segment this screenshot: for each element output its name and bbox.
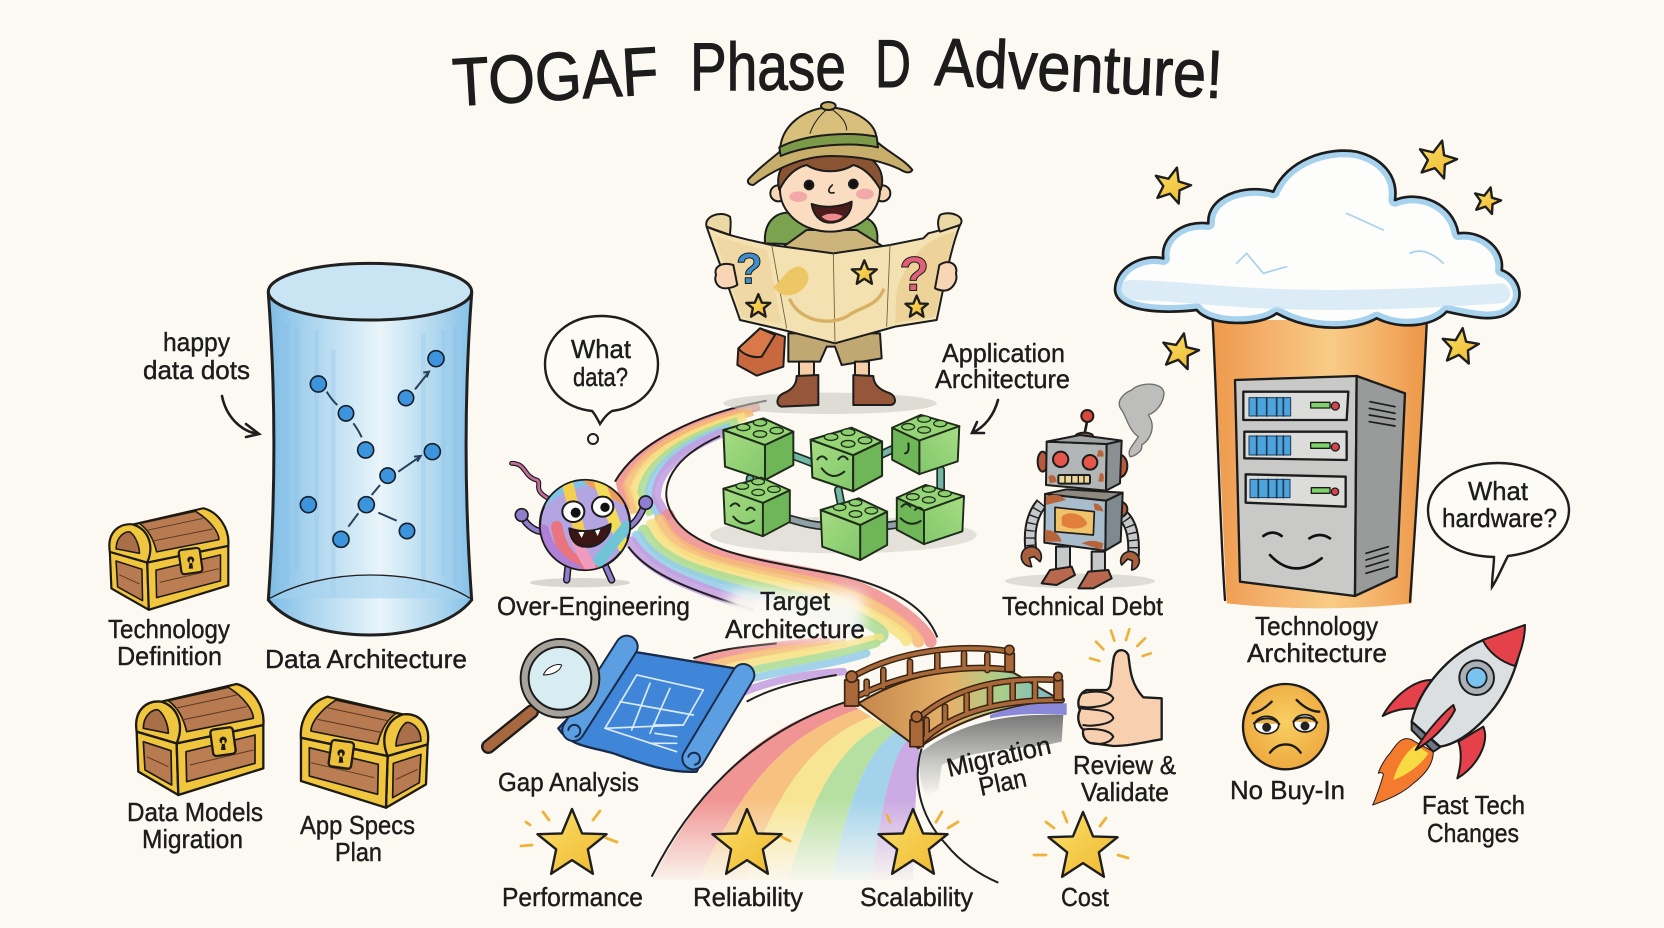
bridge deck — [858, 670, 1063, 748]
rust patches — [1048, 450, 1104, 483]
connectors — [750, 445, 941, 527]
chest: technology definition: Technology — [108, 614, 230, 644]
server drive bays — [1249, 398, 1291, 498]
label: technology architecture: Technology — [1255, 611, 1378, 641]
bridge underside shading — [919, 715, 1063, 795]
star: performance — [502, 809, 643, 912]
sparks — [1090, 629, 1151, 661]
rocket: fast tech changes — [1373, 625, 1525, 805]
sad face: no buy-in — [1243, 684, 1328, 769]
label: review and validate — [1073, 750, 1176, 807]
robot: technical debt — [1005, 384, 1164, 588]
backpack — [765, 213, 877, 247]
orange tower — [1213, 320, 1427, 608]
label: over-engineering: Over-Engineering — [497, 591, 690, 621]
chest: data models migration — [127, 684, 263, 854]
rainbow: lower fan — [652, 702, 920, 880]
label: happy data dots: happy — [163, 327, 230, 357]
technology tower, cloud and server — [1115, 151, 1520, 608]
rainbow path — [615, 401, 998, 883]
head — [770, 185, 786, 201]
label: fast tech changes: Changes — [1427, 818, 1519, 848]
label: fast tech changes — [1422, 790, 1525, 848]
label: application architecture: Application — [942, 338, 1065, 368]
star: cost — [1034, 812, 1128, 912]
cloud stars — [1150, 136, 1504, 371]
brick smiles — [731, 443, 923, 524]
magnifier — [488, 712, 532, 747]
bridge rails — [850, 648, 1062, 743]
label: target architecture: Target — [760, 586, 831, 616]
speech bubble: what hardware — [1428, 463, 1569, 587]
map marks: ? — [736, 245, 762, 293]
title: Phase — [690, 29, 846, 105]
body arms — [1030, 503, 1134, 557]
tail yarn — [512, 463, 552, 500]
title: D — [875, 26, 911, 102]
thumbs up: review and validate — [1078, 629, 1162, 746]
server rack — [1235, 376, 1405, 596]
rainbow: upper curve from explorer — [620, 406, 760, 520]
data dot links — [327, 372, 429, 527]
legs — [1056, 547, 1070, 570]
speech bubble: what data: What — [571, 334, 632, 364]
explorer character: ? — [899, 248, 929, 302]
label: fast tech changes: Fast Tech — [1422, 790, 1525, 820]
server smile — [1263, 533, 1330, 568]
happy data dots — [300, 351, 444, 547]
label: application architecture: Architecture — [935, 364, 1070, 394]
chest: data models migration: Migration — [142, 824, 243, 854]
label: data architecture: Data Architecture — [265, 644, 467, 674]
title: Adventure! — [933, 24, 1224, 113]
paper glow behind target label — [726, 590, 864, 640]
star: reliability — [693, 809, 803, 912]
speech bubble: what data — [545, 316, 658, 444]
pith helmet — [748, 102, 912, 185]
label: review and validate: Validate — [1081, 777, 1169, 807]
title: TOGAF — [450, 33, 661, 121]
torso — [1044, 494, 1106, 551]
satchel — [737, 328, 785, 376]
chest: technology definition: Definition — [117, 641, 222, 671]
speech bubble: what hardware: hardware? — [1442, 503, 1557, 533]
shirt — [783, 230, 883, 263]
rainbow: S bend — [631, 515, 931, 642]
label: application architecture — [935, 338, 1070, 394]
label: target architecture — [725, 586, 865, 644]
label: gap analysis: Gap Analysis — [498, 767, 639, 797]
bridge posts — [845, 645, 1063, 747]
arrow to bricks — [972, 400, 998, 433]
label: technical debt: Technical Debt — [1002, 591, 1164, 621]
boots — [777, 375, 818, 407]
blueprint and magnifier: gap analysis — [488, 643, 745, 772]
treasure map — [707, 225, 960, 343]
label: technology architecture — [1247, 611, 1387, 668]
label: target architecture: Architecture — [725, 614, 865, 644]
rainbow outlines — [615, 401, 998, 883]
star: cost: Cost — [1061, 882, 1110, 912]
smoke — [1119, 384, 1164, 457]
star: performance: Performance — [502, 882, 643, 912]
star: reliability: Reliability — [693, 882, 803, 912]
yarn ball — [540, 480, 630, 570]
cloud — [1115, 151, 1520, 328]
shorts — [788, 333, 882, 365]
rainbow: band to blueprint — [698, 637, 880, 695]
lego bricks with connectors — [710, 415, 977, 560]
speech bubble: what hardware: What — [1468, 476, 1529, 506]
label: migration plan: Plan — [976, 763, 1029, 802]
label: technology architecture: Architecture — [1247, 638, 1387, 668]
star: scalability — [860, 809, 973, 912]
monster: over-engineering — [512, 463, 652, 587]
chest: app specs plan: App Specs — [300, 810, 415, 840]
star: scalability: Scalability — [860, 882, 973, 912]
arms and legs — [522, 503, 645, 580]
arrow to cylinder — [222, 396, 259, 437]
legs — [799, 362, 814, 378]
chest: technology definition — [108, 508, 230, 671]
explorer character — [706, 102, 962, 414]
speech bubble: what data: data? — [573, 362, 628, 392]
label: migration plan: Migration — [944, 730, 1054, 783]
floor plan lines — [605, 675, 703, 752]
label: review and validate: Review & — [1073, 750, 1176, 780]
label: happy data dots — [143, 327, 250, 385]
chest: app specs plan: Plan — [335, 837, 382, 867]
label: no buy-in: No Buy-In — [1230, 775, 1345, 805]
hands — [715, 262, 956, 291]
label: happy data dots: data dots — [143, 355, 250, 385]
server vents — [1366, 402, 1395, 573]
title — [450, 24, 1224, 121]
head — [1038, 452, 1048, 472]
bridge: migration plan — [845, 645, 1067, 795]
chest: data models migration: Data Models — [127, 797, 263, 827]
data cylinder — [268, 263, 472, 635]
chest: app specs plan — [300, 697, 428, 867]
